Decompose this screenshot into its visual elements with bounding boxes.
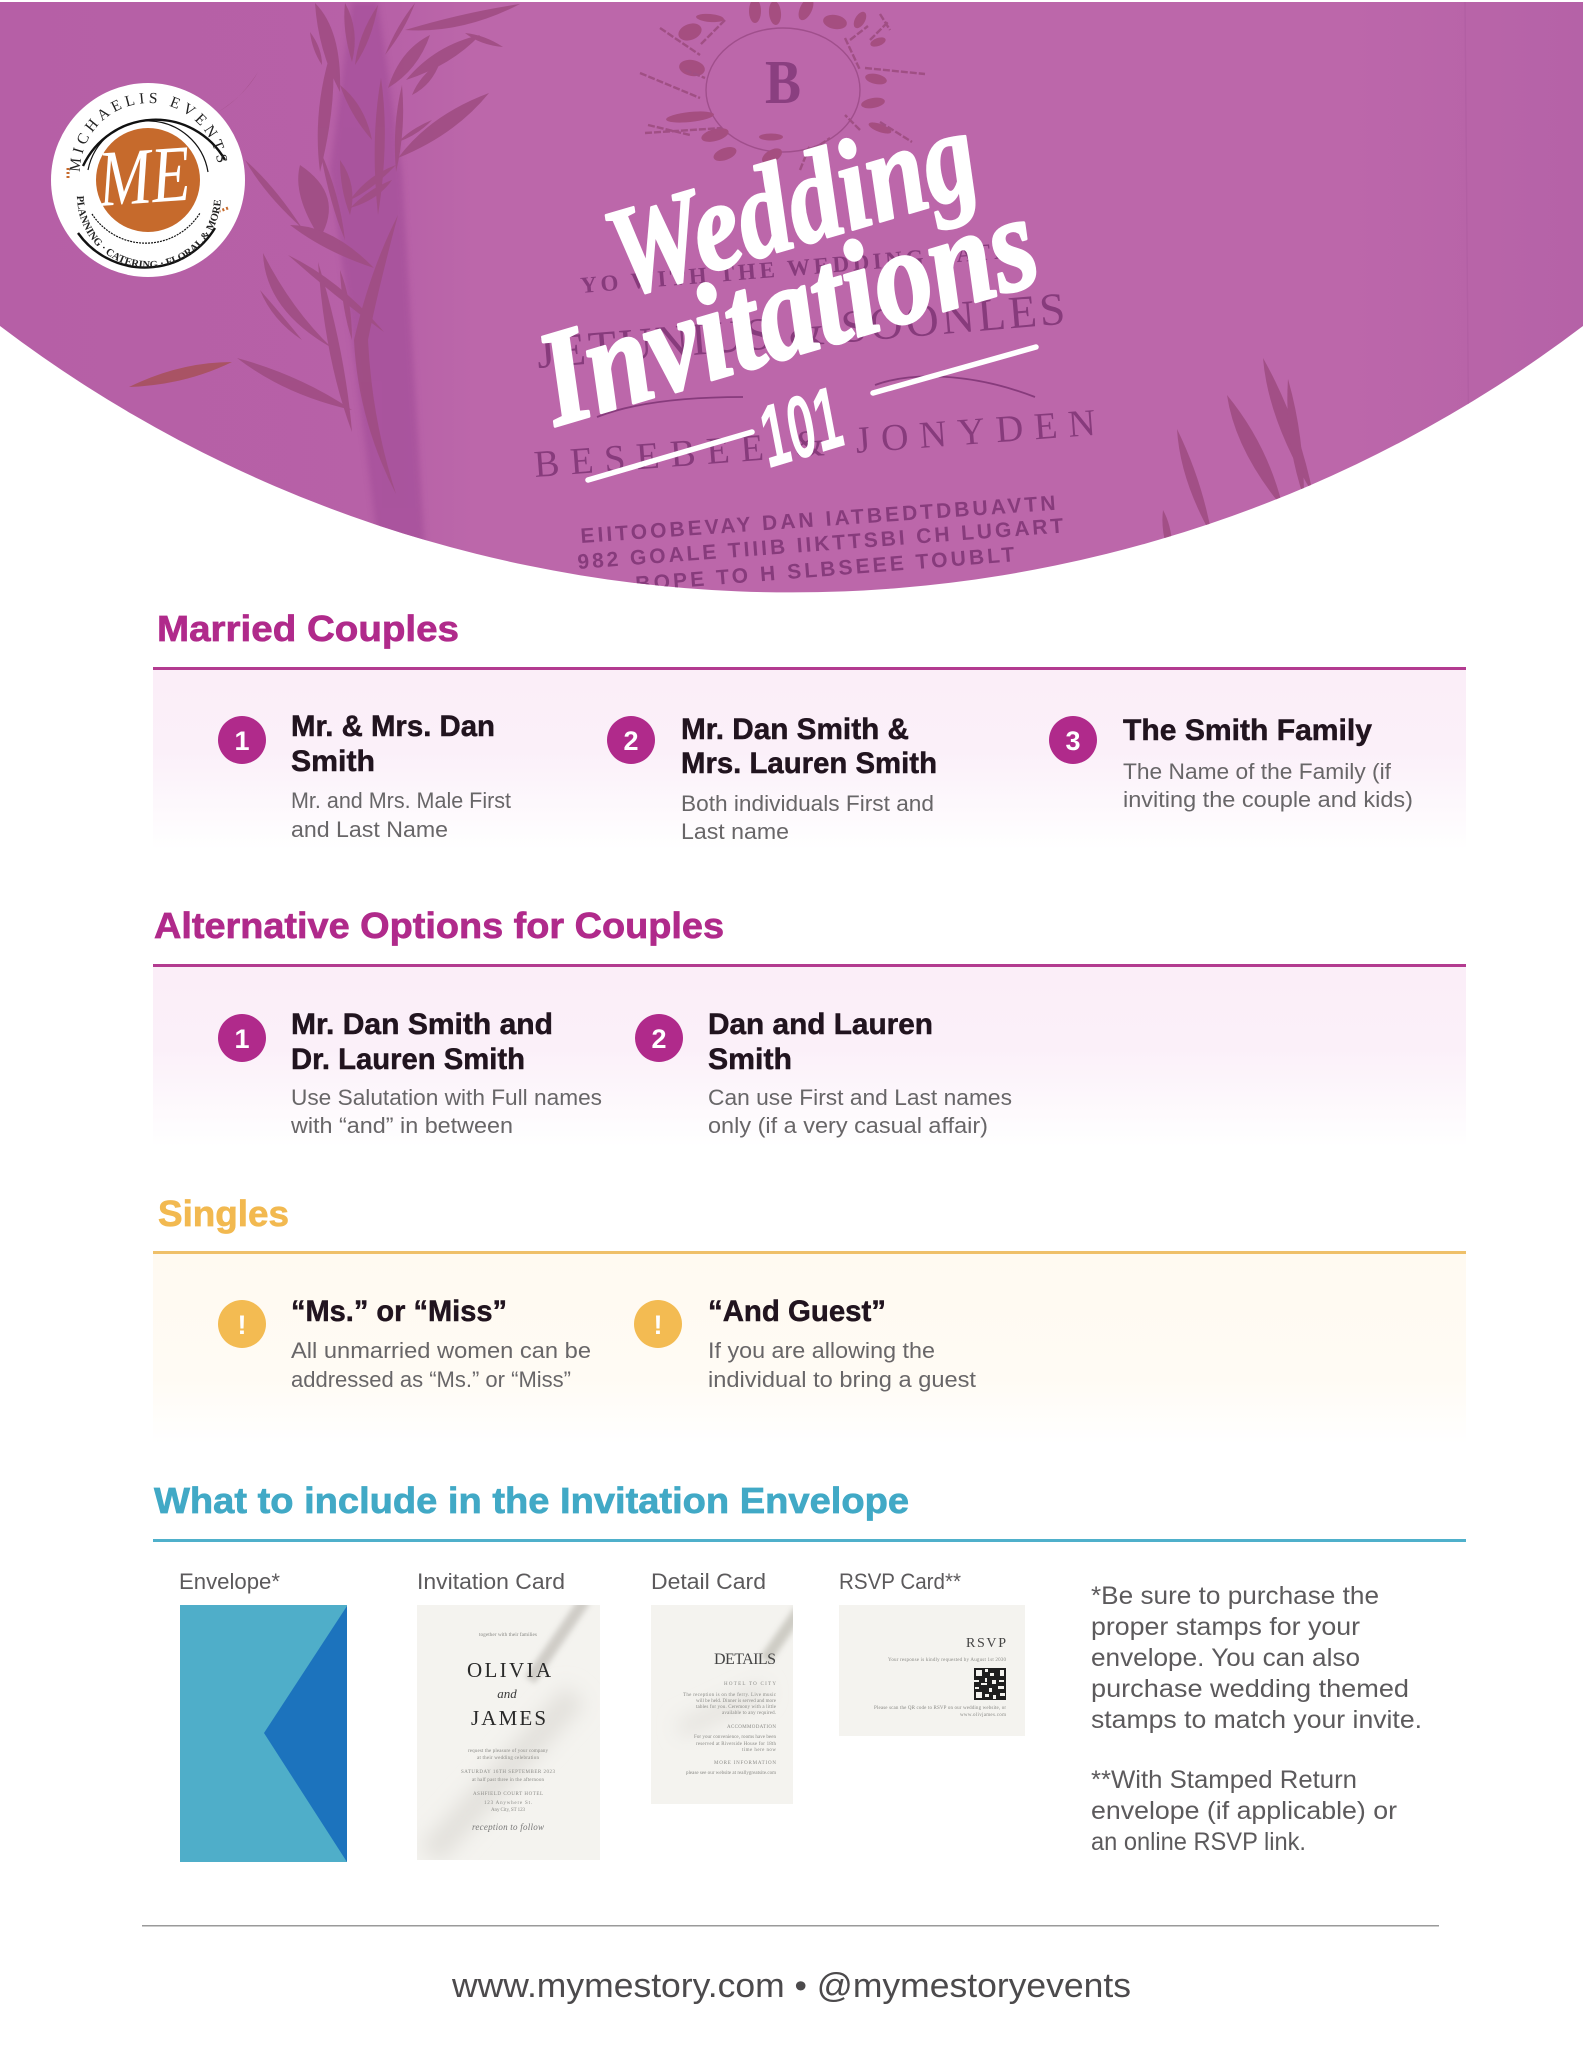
logo badge: Michaelis Events: PLANNING · CATERING · FLORAL & MORE [76, 196, 221, 268]
label: Envelope: Envelope* [179, 1569, 280, 1594]
item 2: Dan and Lauren Smith: Can use First and Last names [708, 1085, 1012, 1110]
heading: Married Couples: Married Couples [157, 608, 459, 649]
text block: notes: *Be sure to purchase the [1091, 1582, 1379, 1610]
printed invitation wording on card: BESEBEE & JONYDEN [533, 402, 1097, 486]
invitation card illustration: at their wedding celebration [477, 1756, 540, 1761]
text block: notes: envelope (if applicable) or [1091, 1797, 1397, 1825]
RSVP card illustration [839, 1605, 1025, 1736]
item 1: Mr. Dan Smith and Dr. Lauren Smith: Mr. Dan Smith and [291, 1008, 553, 1041]
item 1: Mr. & Mrs. Dan Smith [218, 710, 511, 842]
invitation card illustration: request the pleasure of your company [468, 1749, 548, 1754]
item 1: Ms. or Miss: ! [238, 1310, 246, 1340]
item 1: Ms. or Miss: addressed as “Ms.” or “Miss” [291, 1367, 571, 1392]
wreath monogram on card [640, 0, 925, 170]
title: Wedding Invitations 101: Invitations [520, 166, 1054, 455]
footer: website and social handle: www.mymestory.com • @mymestoryevents [451, 1967, 1131, 2005]
detail card illustration: tables for you. Ceremony with a little [696, 1705, 777, 1710]
item 1: Mr. Dan Smith and Dr. Lauren Smith: Dr. Lauren Smith [291, 1043, 525, 1076]
invitation card illustration: SATURDAY 16TH SEPTEMBER 2023 [461, 1770, 556, 1775]
item 1: Mr. Dan Smith and Dr. Lauren Smith: Use Salutation with Full names [291, 1085, 602, 1110]
section: Married Couples [153, 608, 1466, 850]
printed invitation wording on card: JETUNIUS & SOONLES [535, 283, 1067, 378]
invitation card illustration: reception to follow [472, 1822, 544, 1832]
item 2: And Guest: If you are allowing the [708, 1338, 935, 1363]
section: Alternative Options for Couples [153, 905, 1466, 1147]
printed invitation wording on card: BOPE TO H SLBSEEE TOUBLT [635, 543, 1015, 596]
item 1: Mr. Dan Smith and Dr. Lauren Smith: with “and” in between [290, 1113, 513, 1138]
item 1: Ms. or Miss [218, 1295, 591, 1392]
item 1: Mr. & Mrs. Dan Smith: 1 [234, 726, 250, 756]
label: Invitation Card: Invitation Card [417, 1569, 565, 1594]
item 1: Mr. Dan Smith and Dr. Lauren Smith: 1 [234, 1024, 250, 1054]
detail card illustration: The reception is on the ferry. Live music [683, 1693, 777, 1698]
text block: notes: **With Stamped Return [1091, 1766, 1357, 1794]
label: Detail Card: Detail Card [651, 1569, 766, 1594]
text block: notes: an online RSVP link. [1091, 1828, 1306, 1856]
item 2: And Guest [634, 1295, 976, 1392]
section: Singles [153, 1193, 1466, 1444]
section: What to include in the Invitation Envelope [153, 1480, 1466, 1862]
detail card illustration: available to any required. [722, 1711, 776, 1716]
item 3: The Smith Family: inviting the couple and kids) [1123, 787, 1413, 812]
invitation card illustration: OLIVIA [467, 1658, 552, 1682]
item 1: Mr. & Mrs. Dan Smith: and Last Name [291, 817, 448, 842]
item 2: Mr. Dan Smith & Mrs. Lauren Smith: Mr. Dan Smith & [681, 713, 909, 746]
item 3: The Smith Family: The Smith Family [1123, 714, 1372, 747]
item 2: Dan and Lauren Smith: only (if a very casual affair) [708, 1113, 988, 1138]
invitation card illustration [417, 1600, 600, 1860]
printed invitation wording on card [533, 238, 1097, 596]
detail card illustration: DETAILS [714, 1651, 776, 1668]
item 1: Ms. or Miss: “Ms.” or “Miss” [291, 1295, 507, 1328]
detail card illustration [651, 1605, 800, 1804]
heading: Singles: Singles [158, 1193, 289, 1234]
item 2: And Guest: “And Guest” [708, 1295, 886, 1328]
leaves: bottom right branch [1162, 358, 1311, 538]
printed invitation wording on card: 982 GOALE TIIIB IIKTTSBI CH LUGART [577, 515, 1064, 574]
item 2: Dan and Lauren Smith [635, 1008, 1012, 1138]
item 2: Mr. Dan Smith & Mrs. Lauren Smith [607, 713, 937, 844]
detail card illustration: time here now [742, 1748, 776, 1753]
RSVP card illustration: Please scan the QR code to RSVP on our wedding website, or [874, 1706, 1006, 1711]
printed invitation wording on card: EIITOOBEVAY DAN IATBEDTDBUAVTN [580, 492, 1056, 548]
heading: Alternative Options for Couples: Alternative Options for Couples [154, 905, 724, 946]
title: Wedding Invitations 101: Wedding [590, 81, 992, 325]
envelope illustration [180, 1605, 347, 1862]
item 3: The Smith Family: The Name of the Family (if [1123, 759, 1392, 784]
invitation card illustration: Any City, ST 123 [491, 1808, 526, 1813]
invitation card illustration: at half past three in the afternoon [472, 1778, 544, 1783]
item 2: Mr. Dan Smith & Mrs. Lauren Smith: Last name [681, 819, 789, 844]
invitation card illustration: together with their families [479, 1633, 537, 1638]
icon: QR code [974, 1668, 1006, 1700]
leaves: left branch [129, 3, 520, 494]
item 2: Dan and Lauren Smith: Dan and Lauren [708, 1008, 933, 1041]
detail card illustration: ACCOMMODATION [727, 1725, 776, 1730]
title: Wedding Invitations 101: 101 [747, 368, 854, 486]
item 1: Mr. & Mrs. Dan Smith: Mr. and Mrs. Male First [291, 788, 511, 813]
detail card illustration: HOTEL TO CITY [724, 1682, 776, 1687]
item 2: Mr. Dan Smith & Mrs. Lauren Smith: 2 [623, 726, 639, 756]
item 3: The Smith Family: 3 [1065, 726, 1081, 756]
heading: What to include in the Invitation Envelope: What to include in the Invitation Envelope [154, 1480, 909, 1521]
item 1: Mr. & Mrs. Dan Smith: Mr. & Mrs. Dan [291, 710, 495, 743]
item 1: Mr. & Mrs. Dan Smith: Smith [291, 745, 375, 778]
item 3: The Smith Family [1049, 714, 1413, 812]
logo badge: Michaelis Events: ME [94, 130, 193, 224]
invitation card illustration: and [497, 1686, 517, 1701]
invitation card illustration: ASHFIELD COURT HOTEL [473, 1792, 543, 1797]
RSVP card illustration: RSVP [966, 1636, 1006, 1651]
item 1: Ms. or Miss: All unmarried women can be [291, 1338, 591, 1363]
logo badge: Michaelis Events: MICHAELIS EVENTS [70, 92, 228, 172]
label: RSVP Card: RSVP Card** [839, 1569, 961, 1594]
RSVP card illustration: Your response is kindly requested by August 1st 2030 [888, 1658, 1006, 1663]
item 2: And Guest: individual to bring a guest [708, 1367, 976, 1392]
item 2: Dan and Lauren Smith: Smith [708, 1043, 792, 1076]
detail card illustration: MORE INFORMATION [714, 1761, 776, 1766]
printed invitation wording on card: YO WITH THE WEDDING DATE [579, 238, 1010, 298]
text block: notes: envelope. You can also [1091, 1644, 1360, 1672]
detail card illustration: For your convenience, rooms have been [694, 1735, 776, 1740]
item 2: Mr. Dan Smith & Mrs. Lauren Smith: Both individuals First and [681, 791, 934, 816]
hero banner: photo of invitation with purple overlay [0, 0, 1583, 600]
logo badge: Michaelis Events [51, 83, 245, 277]
wreath monogram on card: B [765, 49, 801, 117]
text block: notes: proper stamps for your [1091, 1613, 1360, 1641]
title: Wedding Invitations 101 [520, 81, 1054, 486]
invitation card illustration: JAMES [471, 1706, 546, 1730]
invitation card illustration: 123 Anywhere St. [484, 1801, 532, 1806]
item 1: Mr. Dan Smith and Dr. Lauren Smith [218, 1008, 602, 1138]
item 2: Dan and Lauren Smith: 2 [651, 1024, 667, 1054]
RSVP card illustration: www.olivjames.com [960, 1713, 1006, 1718]
text block: notes: purchase wedding themed [1091, 1675, 1409, 1703]
detail card illustration: reserved at Riverside House for 18th [696, 1742, 776, 1747]
detail card illustration: will be held. Dinner is served and more [696, 1699, 777, 1704]
item 2: Mr. Dan Smith & Mrs. Lauren Smith: Mrs. Lauren Smith [681, 747, 937, 780]
text block: notes [1091, 1582, 1422, 1856]
item 2: And Guest: ! [654, 1310, 662, 1340]
text block: notes: stamps to match your invite. [1091, 1706, 1422, 1734]
detail card illustration: please see our website at reallygreatsite.com [686, 1771, 776, 1776]
